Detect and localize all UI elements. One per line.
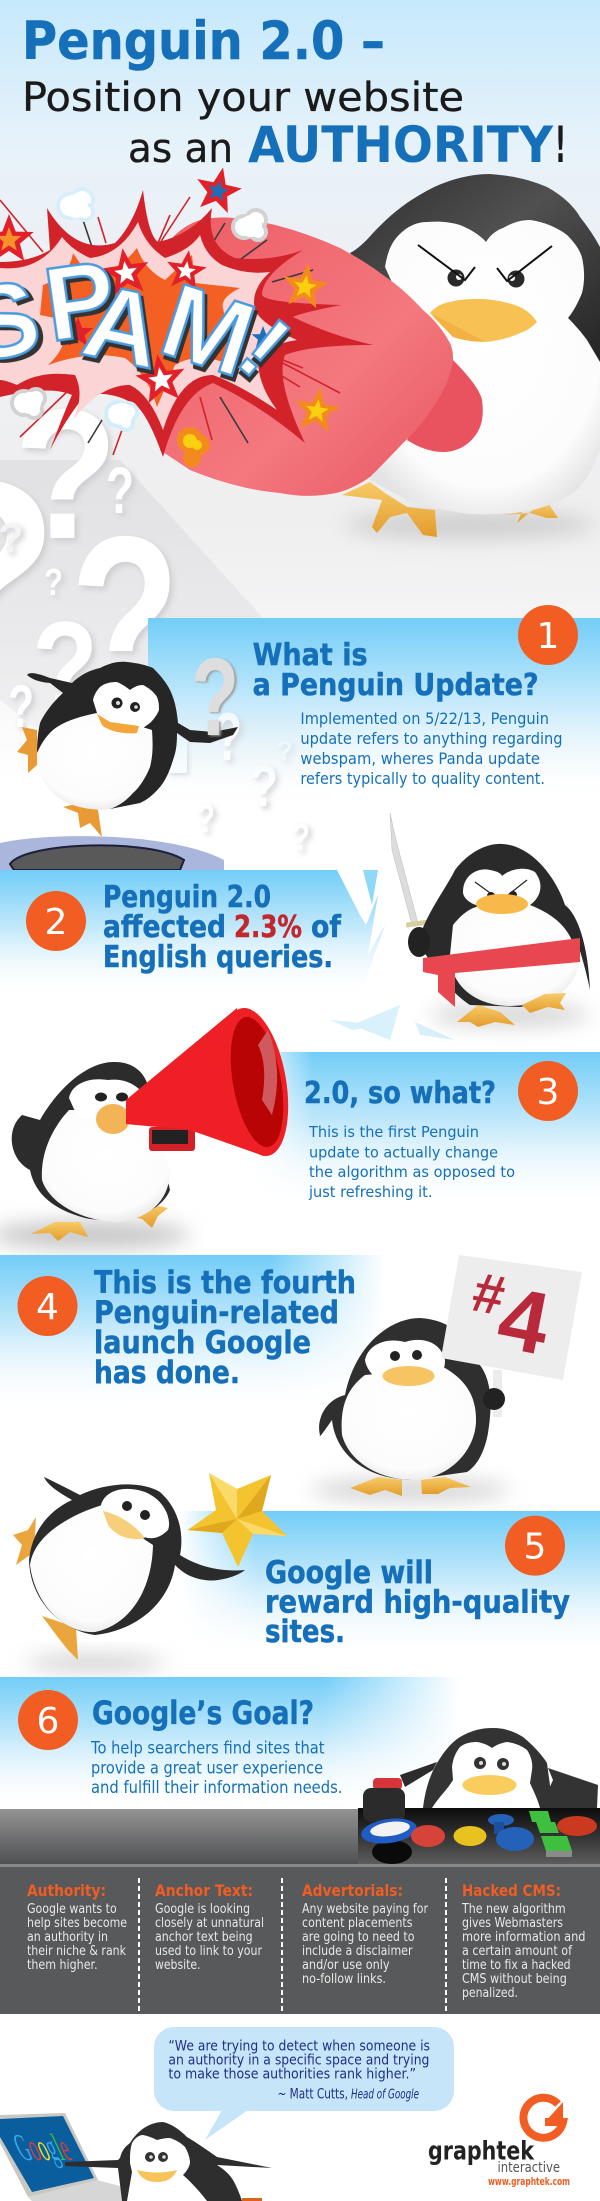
question marks over band: ? [214, 699, 242, 775]
column: Anchor Text: used to link to your [155, 1944, 263, 1959]
belly [42, 1110, 170, 1222]
stick [493, 1370, 502, 1417]
megaphone [126, 1003, 299, 1161]
question marks field: ? [14, 372, 118, 578]
shadow [0, 1221, 190, 1249]
body [417, 844, 590, 1007]
title [22, 11, 566, 174]
heading [94, 1265, 356, 1391]
band [148, 618, 600, 803]
body text: provide a great user experience [91, 1759, 323, 1779]
quote bubble: an authority in a specific space and trying [168, 2053, 429, 2069]
black body [350, 174, 600, 362]
controller penguin [400, 1728, 598, 1808]
column: Anchor Text: Anchor Text: [155, 1881, 253, 1900]
silver question mark: ? [191, 636, 239, 759]
question marks field: ? [250, 754, 278, 819]
body text [308, 1123, 515, 1201]
info panel: definitions [0, 1864, 600, 2014]
band [0, 1677, 452, 1785]
laptop [0, 2113, 132, 2201]
stars and puffs [0, 163, 343, 467]
face [365, 1340, 445, 1380]
number badge [18, 1690, 78, 1750]
body text: and fulfill their information needs. [91, 1778, 342, 1798]
column: Hacked CMS: more information and [462, 1930, 586, 1945]
band [0, 870, 385, 1000]
body and wings [27, 662, 238, 809]
body [423, 1728, 553, 1808]
gold star [188, 1473, 287, 1567]
column: Hacked CMS: The new algorithm [461, 1902, 566, 1917]
question marks field: ? [276, 735, 293, 766]
band [184, 1511, 600, 1631]
number badge: 3 [537, 1072, 559, 1113]
body text: webspam, wheres Panda update [300, 749, 540, 768]
right arm [538, 1768, 598, 1808]
panel 5: reward high-quality sites [184, 1511, 600, 1643]
SPAM lettering: M [148, 261, 268, 400]
pink inner star [0, 222, 297, 430]
body text: To help searchers find sites that [90, 1739, 325, 1759]
white belly [370, 220, 600, 514]
hand [483, 1388, 505, 1410]
megaphone penguin [0, 1003, 299, 1249]
column: Advertorials: Advertorials: [302, 1881, 403, 1900]
column: Hacked CMS: a certain amount of [462, 1944, 572, 1959]
title: AUTHORITY [248, 116, 554, 174]
column: Anchor Text: Google is looking [155, 1902, 250, 1917]
body text [300, 709, 563, 788]
panel 6: Google's goal [0, 1677, 452, 1793]
rays [83, 220, 313, 443]
laptop: Google [6, 2126, 78, 2169]
heading: This is the fourth [94, 1265, 356, 1301]
number badge: 4 [36, 1287, 59, 1328]
hand [408, 927, 430, 957]
heading: has done. [94, 1355, 240, 1391]
heading: Penguin 2.0 [103, 880, 271, 915]
heading: of [311, 910, 342, 945]
number badge: 6 [37, 1701, 59, 1742]
column: Advertorials: no-follow links. [302, 1972, 386, 1987]
grey desk bar [0, 1808, 600, 1864]
feet [350, 1477, 402, 1496]
number badge: 1 [537, 616, 559, 657]
heading: 2.0, so what? [304, 1076, 496, 1111]
quote bubble: ~ Matt Cutts, [278, 2087, 348, 2103]
body text: Implemented on 5/22/13, Penguin [300, 709, 549, 728]
body [12, 1062, 170, 1220]
column: Advertorials: include a disclaimer [302, 1944, 413, 1959]
column: Authority: an authority in [27, 1930, 108, 1945]
column: Hacked CMS: penalized. [462, 1986, 518, 2001]
column: Authority: them higher. [27, 1958, 98, 1973]
shadow [345, 511, 595, 539]
star penguin [13, 1473, 287, 1670]
heading: 2.3% [234, 910, 302, 945]
body text: the algorithm as opposed to [309, 1163, 515, 1181]
text: ! [555, 116, 566, 174]
column: Anchor Text: closely at unnatural [155, 1916, 264, 1931]
body [29, 1477, 245, 1635]
panel 3: 2.0, so what [271, 1052, 600, 1200]
column: Hacked CMS: gives Webmasters [462, 1916, 563, 1931]
title: Position your website [22, 75, 464, 121]
band [271, 1052, 600, 1180]
column: Hacked CMS [461, 1881, 586, 2001]
body and arms [65, 2122, 272, 2201]
quote bubble: Head of Google [351, 2088, 419, 2103]
shadow [310, 1478, 510, 1502]
beak [430, 299, 537, 342]
red outer star [0, 190, 373, 457]
graphtek logo: graphtek [428, 2136, 535, 2166]
heading [103, 880, 342, 975]
heading: English queries. [103, 940, 333, 975]
eyes and brows [418, 245, 552, 288]
trampoline [0, 836, 224, 870]
feet [17, 727, 37, 773]
hero penguin [342, 174, 600, 539]
ice shards [330, 1005, 455, 1040]
body text: update refers to anything regarding [300, 729, 563, 748]
heading: Google’s Goal? [92, 1694, 314, 1732]
belly [450, 905, 578, 1006]
beak [96, 1104, 130, 1134]
panel 4: fourth Penguin-related launch [0, 1255, 378, 1384]
column: Authority [27, 1881, 127, 1973]
column: Authority: Authority: [27, 1881, 106, 1900]
body text: update to actually change [309, 1144, 498, 1162]
body text: This is the first Penguin [308, 1123, 479, 1141]
orange core [40, 248, 240, 407]
column: Advertorials: are going to need to [302, 1930, 415, 1945]
face [463, 869, 540, 905]
column: Authority: their niche & rank [27, 1944, 126, 1959]
title: as an [128, 126, 233, 172]
graphtek logo [428, 2098, 570, 2188]
quote bubble: “We are trying to detect when someone is [168, 2039, 430, 2055]
face [93, 682, 159, 728]
sign penguin [310, 1255, 582, 1502]
heading: a Penguin Update? [253, 668, 539, 703]
body text [90, 1739, 343, 1798]
heading: launch Google [94, 1325, 311, 1361]
quote bubble: to make those authorities rank higher.” [168, 2067, 416, 2083]
body text: refers typically to quality content. [300, 769, 545, 788]
question marks field [0, 372, 340, 859]
sign [441, 1255, 582, 1380]
question marks field: ? [8, 673, 34, 740]
belly [30, 1505, 153, 1632]
SPAM lettering [0, 239, 307, 400]
belly [37, 713, 153, 810]
column: Hacked CMS: CMS without being [462, 1972, 567, 1987]
heading: affected [103, 910, 226, 945]
title: Penguin 2.0 – [22, 11, 385, 72]
column: Advertorials: and/or use only [302, 1958, 390, 1973]
column: Anchor Text: anchor text being [155, 1930, 253, 1945]
number badge [518, 1061, 578, 1121]
question marks field: ? [292, 817, 310, 859]
feet [31, 1222, 88, 1241]
heading [253, 638, 539, 703]
column: Advertorials: content placements [302, 1916, 413, 1931]
column: Hacked CMS: time to fix a hacked [462, 1958, 571, 1973]
panel 1: what is a Penguin update [148, 605, 600, 803]
red belt [423, 938, 580, 1007]
foot [242, 2198, 262, 2201]
face [127, 2135, 207, 2201]
column: Authority: help sites become [27, 1916, 127, 1931]
heading: Penguin-related [94, 1295, 339, 1331]
ninja penguin [330, 813, 590, 1040]
number badge: 2 [45, 902, 67, 943]
body [319, 1318, 491, 1480]
question marks field: ? [106, 453, 134, 527]
sword [390, 813, 418, 925]
column: Advertorials [302, 1881, 429, 1987]
question marks field: ? [44, 562, 63, 604]
left arm [400, 1762, 437, 1787]
feet [457, 1005, 515, 1027]
SPAM lettering: A [73, 261, 172, 392]
SPAM lettering: P [37, 239, 123, 364]
column: Anchor Text [155, 1881, 264, 1973]
graphtek logo: interactive [498, 2160, 560, 2176]
number badge [26, 891, 86, 951]
question marks field: ? [32, 594, 98, 740]
shadow [25, 1656, 165, 1670]
panel 2: 2.3% of English queries [0, 870, 385, 1000]
heading: sites. [265, 1614, 345, 1650]
column: Advertorials: Any website paying for [302, 1902, 429, 1917]
heading: What is [253, 638, 368, 673]
body text: just refreshing it. [308, 1183, 432, 1201]
question marks field: ? [70, 487, 180, 750]
explosion burst [0, 163, 373, 467]
number badge: 5 [524, 1527, 546, 1568]
question marks field: ? [197, 797, 215, 841]
belly [342, 1368, 476, 1480]
SPAM lettering: ! [220, 301, 307, 396]
laptop penguin [65, 2122, 272, 2201]
face [432, 1742, 540, 1808]
number badge [505, 1516, 565, 1576]
band [0, 1255, 378, 1382]
arcade controller [360, 1778, 597, 1864]
column: Anchor Text: website. [155, 1958, 200, 1973]
column: Authority: Google wants to [27, 1902, 117, 1917]
jumping penguin with question mark [17, 636, 239, 837]
number badge [18, 1276, 78, 1336]
boxing glove [160, 217, 483, 496]
heading: Google will [265, 1555, 433, 1591]
heading [265, 1555, 570, 1650]
sign: # [468, 1260, 510, 1327]
feet [342, 482, 437, 537]
face [69, 1079, 147, 1118]
sign: 4 [490, 1267, 557, 1374]
feet [13, 1517, 36, 1565]
face [101, 1489, 169, 1538]
column: Hacked CMS: Hacked CMS: [462, 1881, 561, 1900]
number badge [518, 605, 578, 665]
quote bubble [154, 2027, 454, 2140]
